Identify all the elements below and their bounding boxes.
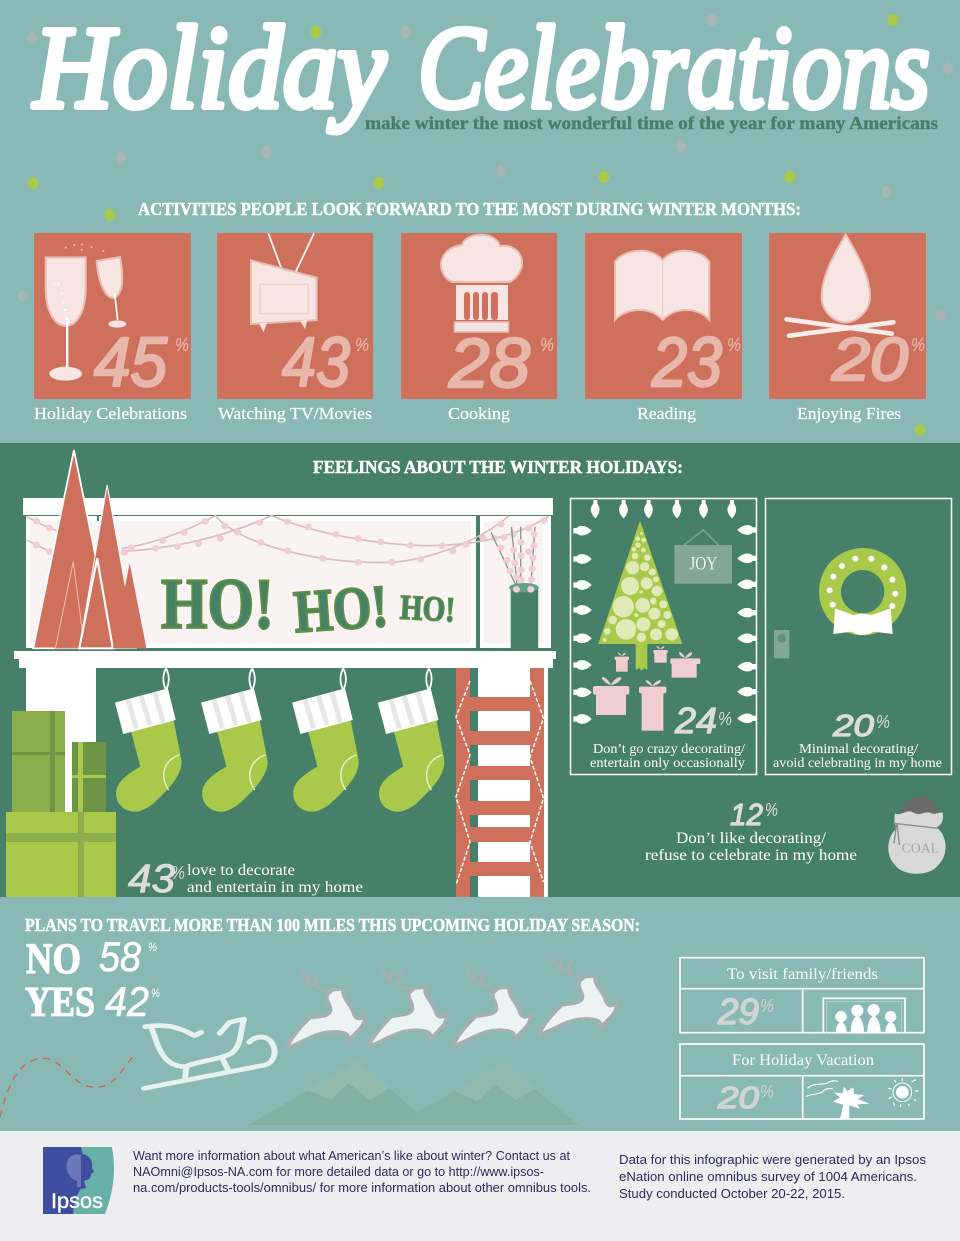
stat: 45 percent: 45 xyxy=(94,323,168,401)
stat: 20 percent: 20 xyxy=(717,1080,759,1115)
panel: holiday celebrations xyxy=(34,233,191,401)
dashed flight path xyxy=(0,1053,137,1117)
garlands xyxy=(27,516,548,566)
activity labels: Cooking xyxy=(448,404,510,423)
icon: palm, birds and sun xyxy=(806,1078,919,1119)
snow dots xyxy=(18,14,953,436)
stat: 12 percent: refuse to celebrate in my home xyxy=(645,847,857,864)
footer text: contact xyxy=(133,1148,591,1195)
candy column xyxy=(456,668,548,897)
box frame xyxy=(680,958,924,1033)
panel: minimal decorating xyxy=(766,498,952,774)
footer text: contact: Want more information about what American’s like about winter? Contact us at xyxy=(133,1148,570,1163)
stat: 20 percent: % xyxy=(911,335,925,355)
label: vacation: For Holiday Vacation xyxy=(732,1052,874,1069)
joy sign xyxy=(674,530,732,584)
panel: cooking xyxy=(401,233,557,402)
stat: 12 percent: Don’t like decorating/ xyxy=(676,830,827,847)
stat: 43 percent: 43 xyxy=(282,323,350,401)
activity labels xyxy=(34,404,901,423)
text: minimal decorating: Minimal decorating/ xyxy=(799,742,918,757)
footer xyxy=(0,1131,960,1241)
panel: reading xyxy=(585,233,742,401)
footer text: methodology: Data for this infographic were generated by an Ipsos xyxy=(619,1152,927,1167)
fireplace mantel xyxy=(14,498,556,813)
stat: 43 percent love to decorate: and entertain in my home xyxy=(187,879,363,896)
ipsos logo xyxy=(43,1147,114,1214)
icon: chef hat xyxy=(441,235,522,332)
reindeer 4 xyxy=(539,957,616,1035)
stat: 24 percent: 24 xyxy=(674,700,717,741)
joy sign: JOY xyxy=(689,553,717,574)
stat: 43 percent: % xyxy=(355,335,369,355)
stat: 20 percent xyxy=(832,708,890,743)
stat: yes 42 percent: % xyxy=(151,986,160,1000)
stat: 12 percent: % xyxy=(765,800,778,820)
stat: no 58 percent: NO xyxy=(26,936,81,983)
section: feelings xyxy=(0,443,960,897)
stat: 28 percent: 28 xyxy=(448,324,530,402)
stat: 43 percent love to decorate: 43 xyxy=(128,857,175,901)
text: minimal decorating: avoid celebrating in my home xyxy=(773,756,942,771)
stat: 23 percent: % xyxy=(727,335,741,355)
stat: 29 percent: % xyxy=(760,996,774,1016)
footer text: methodology xyxy=(619,1152,927,1201)
heading: feelings: FEELINGS ABOUT THE WINTER HOLIDAYS: xyxy=(313,457,683,477)
text: dont go crazy: entertain only occasionally xyxy=(590,756,745,771)
logo tree xyxy=(67,1154,81,1187)
logo wordmark: Ipsos xyxy=(51,1190,103,1213)
reindeer 3 xyxy=(453,968,530,1046)
stocking 3 xyxy=(292,668,359,812)
stat: 45 percent: % xyxy=(175,335,189,355)
stat: 43 percent love to decorate xyxy=(128,857,363,901)
icon: champagne glasses xyxy=(46,243,126,381)
reindeer 2 xyxy=(369,968,446,1046)
panel: visit family xyxy=(680,958,924,1033)
title: Holiday xyxy=(32,2,387,133)
vase with branches xyxy=(491,527,539,648)
stat: 43 percent love to decorate: % xyxy=(171,863,185,883)
activity labels: Watching TV/Movies xyxy=(218,404,372,423)
text: dont go crazy xyxy=(590,742,745,771)
icon: television xyxy=(251,233,317,332)
footer text: contact: NAOmni@Ipsos-NA.com for more detailed data or go to http://www.ipsos- xyxy=(133,1164,544,1179)
panel: decorating moderately xyxy=(570,498,756,774)
title xyxy=(32,2,930,133)
stockings xyxy=(115,668,444,812)
stat: yes 42 percent: 42 xyxy=(105,978,149,1025)
ho ho ho: HO! xyxy=(399,588,456,629)
ho ho ho: HO! xyxy=(161,564,274,644)
stat: 12 percent: 12 xyxy=(730,797,763,832)
icon: coal sack: COAL xyxy=(902,841,939,856)
text: minimal decorating xyxy=(773,742,942,771)
stat: 24 percent xyxy=(674,700,732,741)
gifts pile xyxy=(6,711,116,897)
icon: christmas tree xyxy=(598,521,682,671)
logo head silhouette xyxy=(81,1154,94,1189)
activity labels: Holiday Celebrations xyxy=(34,404,187,423)
stat: 29 percent: 29 xyxy=(717,991,759,1032)
stat: 43 percent love to decorate: love to decorate xyxy=(187,862,295,879)
stat: yes 42 percent xyxy=(25,978,160,1026)
subtitle: make winter the most wonderful time of the year for many Americans xyxy=(365,113,938,133)
heading: travel plans: PLANS TO TRAVEL MORE THAN 100 MILES THIS UPCOMING HOLIDAY SEASON: xyxy=(25,915,640,935)
footer text: contact: na.com/products-tools/omnibus/ for more information about other omnibus tools. xyxy=(133,1180,591,1195)
text: dont go crazy: Don’t go crazy decorating/ xyxy=(593,742,745,757)
mountains xyxy=(248,1060,579,1125)
holiday trees xyxy=(33,450,146,648)
stat: no 58 percent xyxy=(26,933,157,983)
activity labels: Enjoying Fires xyxy=(797,404,901,423)
stat: 24 percent: % xyxy=(718,709,732,729)
panel: holiday vacation xyxy=(680,1044,924,1119)
stocking 4 xyxy=(378,668,444,812)
panel: fires xyxy=(769,233,926,399)
icon: coal sack xyxy=(888,797,946,874)
icon: sleigh xyxy=(144,1019,275,1088)
footer text: methodology: eNation online omnibus survey of 1004 Americans. xyxy=(619,1169,917,1184)
icon: family portrait xyxy=(823,998,905,1033)
ho ho ho: HO! xyxy=(292,573,390,645)
footer text: methodology: Study conducted October 20-22, 2015. xyxy=(619,1186,845,1201)
stat: yes 42 percent: YES xyxy=(25,980,95,1026)
stat: 20 percent: % xyxy=(876,712,890,732)
activity labels: Reading xyxy=(637,404,696,423)
stat: 28 percent: % xyxy=(540,335,554,355)
icon: wreath xyxy=(819,548,906,635)
stocking 2 xyxy=(201,668,268,812)
label: family: To visit family/friends xyxy=(727,966,878,983)
stat: 20 percent: 20 xyxy=(832,708,874,743)
stat: 12 percent xyxy=(645,797,857,864)
heading: activities: ACTIVITIES PEOPLE LOOK FORWARD TO THE MOST DURING WINTER MONTHS: xyxy=(138,199,801,219)
section: travel xyxy=(0,915,640,1125)
stat: no 58 percent: 58 xyxy=(99,933,142,980)
stat: no 58 percent: % xyxy=(148,940,157,954)
stat: 20 percent: 20 xyxy=(831,326,908,393)
stat: 20 percent: % xyxy=(760,1082,774,1102)
gifts xyxy=(593,646,700,731)
stat: 20 percent xyxy=(717,1080,774,1115)
door knob plate xyxy=(774,630,789,658)
ho ho ho xyxy=(161,564,456,645)
box frame xyxy=(680,1044,924,1119)
icon: open book xyxy=(615,251,709,320)
stocking 1 xyxy=(115,668,182,812)
stat: 23 percent: 23 xyxy=(651,323,722,401)
lights border xyxy=(573,500,756,724)
reindeer 1 xyxy=(287,970,364,1048)
icon: campfire xyxy=(787,234,893,336)
panel: tv xyxy=(217,233,373,401)
